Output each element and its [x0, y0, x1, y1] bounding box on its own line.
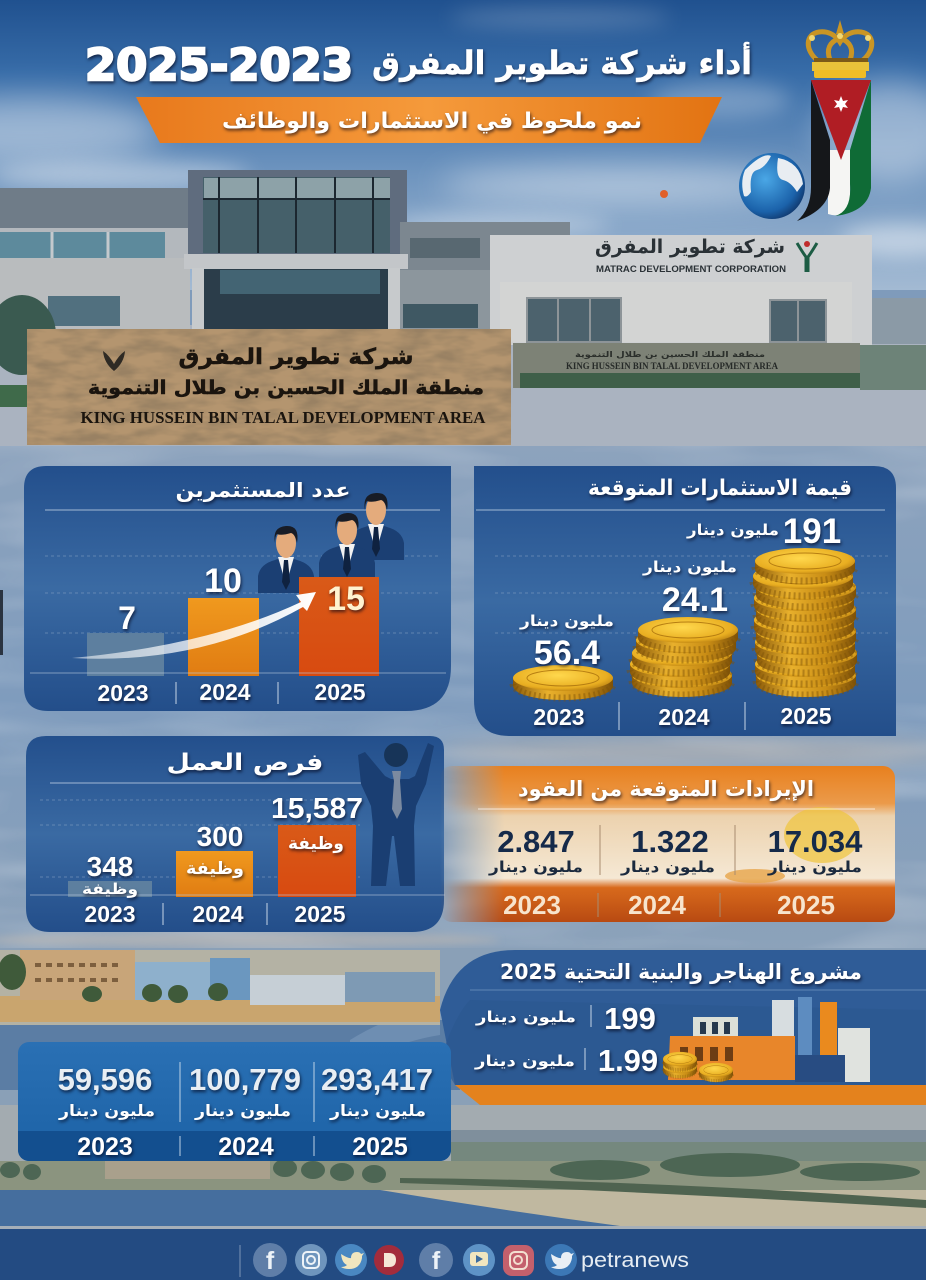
panel: number of investors: 2025 [314, 679, 366, 705]
icon: flag of Jordan [797, 80, 871, 221]
low wall sign [513, 343, 926, 390]
years: 2023 [97, 680, 149, 706]
stone sign: شركة تطوير المفرق [178, 345, 414, 370]
icon: instagram [295, 1244, 327, 1276]
tower [188, 170, 407, 260]
bar 2024 [188, 598, 259, 676]
title: أداء شركة تطوير المفرق [372, 42, 752, 82]
panel: total value: 2024 [218, 1133, 274, 1161]
icon: twitter [335, 1244, 367, 1276]
coins [663, 1052, 733, 1082]
panel: total value: مليون دينار [194, 1102, 291, 1120]
coin decoration [784, 807, 860, 863]
icon: facebook [419, 1243, 453, 1277]
values: 293,417 [321, 1062, 433, 1097]
heading: عدد المستثمرين [176, 478, 350, 502]
panel: expected contract revenue: 2024 [628, 890, 686, 920]
panel: job opportunities: وظيفة [288, 834, 344, 854]
values: 191 [783, 512, 841, 551]
heading: قيمة الاستثمارات المتوقعة [588, 476, 852, 501]
heading: الإيرادات المتوقعة من العقود [518, 777, 814, 801]
years: 2023 [84, 901, 136, 927]
handle: petranews [581, 1249, 689, 1272]
orange strip [455, 1085, 926, 1105]
stone sign: KING HUSSEIN BIN TALAL DEVELOPMENT AREA [80, 408, 486, 427]
factory [668, 997, 870, 1082]
panel: expected investment value: مليون دينار [686, 521, 779, 539]
heading: فرص العمل [166, 750, 324, 776]
panel: hangars and infrastructure project [440, 950, 926, 1085]
scene: palms and water [0, 1105, 926, 1226]
scene: town painting [0, 950, 440, 1025]
icon: facebook [253, 1243, 287, 1277]
icon: globe [739, 153, 805, 219]
values: 15,587 [271, 793, 363, 825]
years: 2025 [777, 890, 835, 920]
subtitle banner: نمو ملحوظ في الاستثمارات والوظائف [222, 109, 642, 134]
panel: number of investors: 15 [327, 580, 365, 618]
panel: number of investors [24, 466, 451, 711]
panel: expected investment value: مليون دينار [519, 612, 614, 630]
middle background [0, 446, 926, 956]
bar 2025 [278, 825, 356, 897]
building sign: MATRAC DEVELOPMENT CORPORATION [596, 264, 786, 275]
panel: job opportunities: 300 [197, 821, 243, 852]
panel: expected contract revenue: مليون دينار [488, 858, 583, 876]
panel: hangars and infrastructure project: مليون دينار [474, 1052, 575, 1070]
panel: expected contract revenue: 2023 [503, 890, 561, 920]
icon: instagram colour [503, 1245, 534, 1276]
panel: total value: مليون دينار [329, 1102, 426, 1120]
arrow [72, 592, 316, 659]
panel: expected contract revenue: 2.847 [497, 824, 575, 859]
panel: job opportunities [26, 736, 445, 932]
lower background [0, 948, 926, 1228]
panel: expected investment value: 2025 [780, 703, 832, 729]
panel: total value: 100,779 [189, 1062, 301, 1097]
background sky [0, 0, 926, 290]
icon: crown [808, 20, 872, 78]
coins 2024 [630, 617, 738, 697]
panel: hangars and infrastructure project: مليون دينار [475, 1008, 576, 1026]
years: 2023 [533, 704, 585, 730]
panel: number of investors: 10 [204, 562, 242, 600]
ground [0, 325, 926, 455]
road and water [0, 1005, 460, 1090]
panel: job opportunities: وظيفة [82, 880, 138, 898]
panel: expected investment value: 2024 [658, 704, 710, 730]
icon: stone sign logo [103, 351, 125, 371]
man with raised arms [358, 743, 434, 886]
panel: hangars and infrastructure project: 1.99 [598, 1043, 658, 1078]
panel: job opportunities: 2025 [294, 901, 346, 927]
left wing [0, 188, 190, 232]
panel: total value: 2023 [77, 1133, 133, 1161]
clouds [0, 8, 926, 256]
heading: مشروع الهناجر والبنية التحتية 2025 [500, 960, 862, 984]
icon: facebook: f [266, 1247, 275, 1275]
panel: job opportunities: 348 [87, 851, 133, 882]
right block [490, 235, 872, 345]
values: 17.034 [768, 824, 863, 859]
footer [0, 1226, 926, 1280]
panel: total value: مليون دينار [58, 1102, 155, 1120]
icon: company logo [797, 241, 817, 272]
orange dot [660, 190, 668, 198]
panel: expected contract revenue: 1.322 [631, 824, 709, 859]
years: 2025 [352, 1133, 408, 1161]
low wall sign: منطقة الملك الحسين بن طلال التنموية [575, 350, 765, 359]
bar 2024 [176, 851, 253, 897]
icon: youtube [374, 1245, 404, 1275]
stone sign [27, 329, 511, 445]
panel: total value [18, 1042, 451, 1161]
bar 2023 [68, 881, 152, 897]
icon: play [463, 1244, 495, 1276]
tree left [0, 295, 56, 407]
panel: expected contract revenue: مليون دينار [767, 858, 862, 876]
icon: facebook: f [432, 1247, 441, 1275]
building sign [595, 236, 817, 275]
panel: number of investors: 2024 [199, 679, 251, 705]
panel: expected investment value [474, 466, 896, 736]
subtitle banner [136, 97, 722, 143]
panel: expected investment value: 56.4 [534, 634, 600, 672]
building photograph [0, 170, 926, 345]
values: 7 [118, 600, 136, 636]
building sign: شركة تطوير المفرق [595, 236, 785, 258]
coins 2025 [753, 548, 857, 697]
title [85, 40, 752, 91]
stone sign: منطقة الملك الحسين بن طلال التنموية [88, 377, 484, 399]
panel: expected contract revenue [440, 766, 895, 922]
panel: expected investment value: 24.1 [662, 581, 728, 619]
bar 2023 [87, 633, 164, 676]
coins 2023 [513, 665, 613, 700]
icon: twitter [545, 1244, 577, 1276]
values: 199 [604, 1001, 656, 1036]
low wall sign: KING HUSSEIN BIN TALAL DEVELOPMENT AREA [566, 362, 778, 372]
panel: job opportunities: 2024 [192, 901, 244, 927]
panel: expected investment value: مليون دينار [642, 558, 737, 576]
emblem: crown, flag and globe [739, 20, 872, 221]
panel: job opportunities: وظيفة [186, 859, 244, 879]
title: 2025-2023 [85, 40, 353, 91]
panel: total value: 59,596 [58, 1062, 152, 1097]
panel: expected contract revenue: مليون دينار [620, 858, 715, 876]
people [258, 493, 404, 593]
bar 2025 [299, 577, 379, 676]
